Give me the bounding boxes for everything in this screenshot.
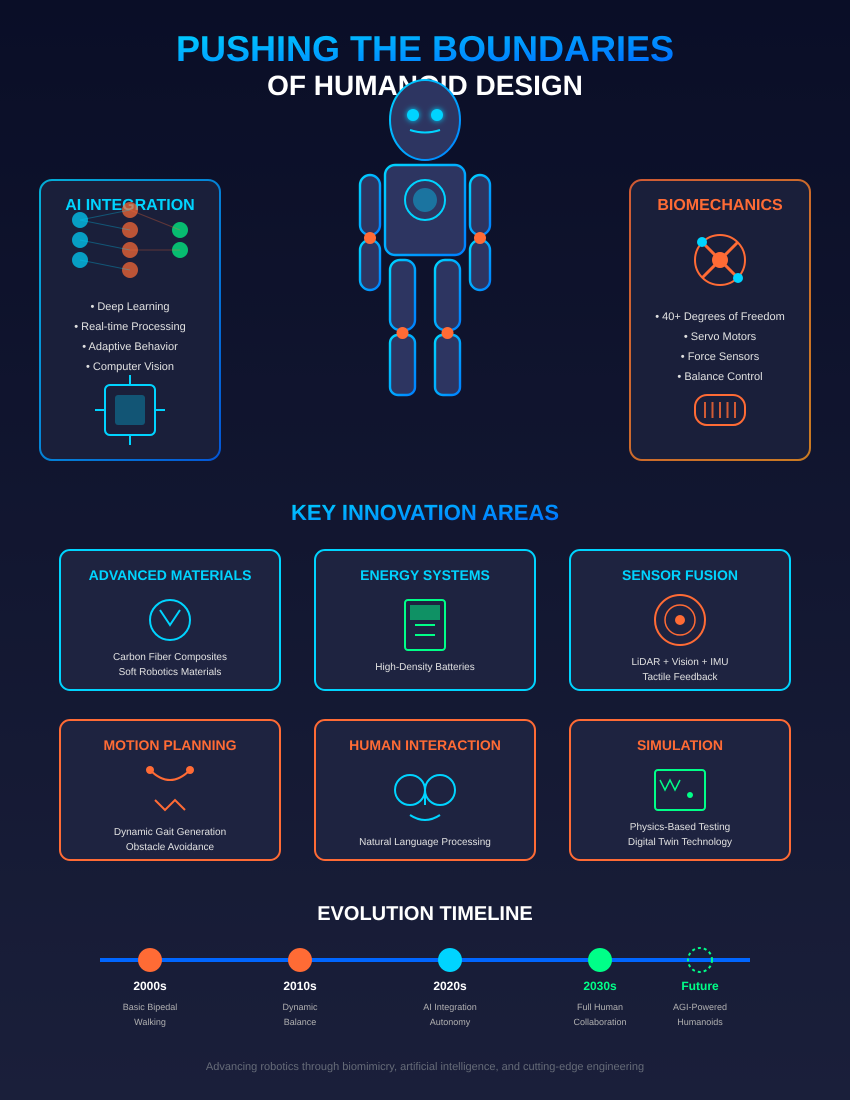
icon: joint	[695, 235, 745, 285]
card text	[114, 827, 226, 853]
card heading: ADVANCED MATERIALS	[89, 567, 251, 583]
card heading: SENSOR FUSION	[622, 567, 738, 583]
robot arms	[360, 175, 490, 290]
robot joints	[364, 232, 486, 339]
panel heading: BIOMECHANICS	[657, 197, 783, 214]
panel frame	[630, 180, 810, 460]
card text: Obstacle Avoidance	[126, 842, 215, 853]
milestone: 2000s: Basic Bipedal	[123, 1002, 177, 1012]
card text	[113, 652, 227, 678]
card heading: SIMULATION	[637, 737, 723, 753]
title line one: PUSHING THE BOUNDARIES	[176, 28, 674, 69]
robot legs	[390, 260, 460, 395]
milestone: 2020s: 2020s	[433, 979, 467, 993]
card text	[628, 822, 732, 848]
card text: Tactile Feedback	[642, 672, 719, 683]
card text: Physics-Based Testing	[630, 822, 730, 833]
milestone: 2000s	[123, 948, 177, 1027]
feature list: • Adaptive Behavior	[82, 341, 178, 353]
icon: battery	[405, 600, 445, 650]
milestone: 2030s: 2030s	[583, 979, 617, 993]
card: advanced materials	[60, 550, 280, 690]
feature list: • Force Sensors	[681, 351, 760, 363]
card: energy systems	[315, 550, 535, 690]
milestone: 2020s	[423, 948, 477, 1027]
feature list: • Servo Motors	[684, 331, 757, 343]
icon: processor chip	[95, 375, 165, 445]
card text: LiDAR + Vision + IMU	[631, 657, 729, 668]
card heading: HUMAN INTERACTION	[349, 737, 501, 753]
milestone: future: AGI-Powered	[673, 1002, 727, 1012]
milestone: 2000s: 2000s	[133, 979, 167, 993]
heading: evolution timeline: EVOLUTION TIMELINE	[317, 903, 533, 925]
icon: actuator	[695, 395, 745, 425]
title	[176, 28, 674, 101]
milestone: future: Future	[681, 979, 719, 993]
milestone: 2000s: Walking	[134, 1017, 166, 1027]
robot torso	[385, 165, 465, 255]
card text: Digital Twin Technology	[628, 837, 732, 848]
milestone: 2030s: Collaboration	[573, 1017, 627, 1027]
milestone: future	[673, 948, 727, 1027]
feature list: • 40+ Degrees of Freedom	[655, 311, 785, 323]
milestone: 2020s: Autonomy	[430, 1017, 471, 1027]
milestone: 2020s: AI Integration	[423, 1002, 477, 1012]
milestone: 2030s	[573, 948, 627, 1027]
panel: AI integration	[40, 180, 220, 460]
card heading: MOTION PLANNING	[104, 737, 237, 753]
card text: Carbon Fiber Composites	[113, 652, 227, 663]
milestone: 2010s: Dynamic	[282, 1002, 318, 1012]
heading: key innovation areas: KEY INNOVATION AREAS	[291, 500, 559, 525]
panel frame	[40, 180, 220, 460]
milestone: 2010s: 2010s	[283, 979, 317, 993]
card text: Soft Robotics Materials	[119, 667, 221, 678]
feature list: • Real-time Processing	[74, 321, 186, 333]
timeline axis	[100, 958, 750, 962]
feature list	[655, 311, 785, 383]
icon: motion path	[146, 766, 194, 810]
panel: biomechanics	[630, 180, 810, 460]
card heading: ENERGY SYSTEMS	[360, 567, 490, 583]
card text	[631, 657, 729, 683]
card text: Natural Language Processing	[359, 837, 491, 848]
milestone: 2010s: Balance	[284, 1017, 316, 1027]
icon: material weave	[150, 600, 190, 640]
milestone: 2030s: Full Human	[577, 1002, 623, 1012]
card text: High-Density Batteries	[375, 662, 475, 673]
icon: face	[395, 775, 455, 820]
robot head	[390, 80, 460, 160]
title line two: OF HUMANOID DESIGN	[267, 70, 583, 101]
icon: sensor target	[655, 595, 705, 645]
feature list: • Deep Learning	[90, 301, 170, 313]
panel heading: AI INTEGRATION	[65, 197, 195, 214]
feature list: • Computer Vision	[86, 361, 174, 373]
feature list: • Balance Control	[677, 371, 763, 383]
icon: simulation screen	[655, 770, 705, 810]
card: simulation	[570, 720, 790, 860]
card: sensor fusion	[570, 550, 790, 690]
card text: Dynamic Gait Generation	[114, 827, 226, 838]
humanoid robot	[360, 80, 490, 395]
card: human interaction	[315, 720, 535, 860]
feature list	[74, 301, 186, 373]
timeline	[100, 948, 750, 1027]
card: motion planning	[60, 720, 280, 860]
milestone: future: Humanoids	[677, 1017, 723, 1027]
footer: Advancing robotics through biomimicry, artificial intelligence, and cutting-edge engineering	[206, 1061, 644, 1073]
icon: neural network	[72, 202, 188, 278]
milestone: 2010s	[282, 948, 318, 1027]
